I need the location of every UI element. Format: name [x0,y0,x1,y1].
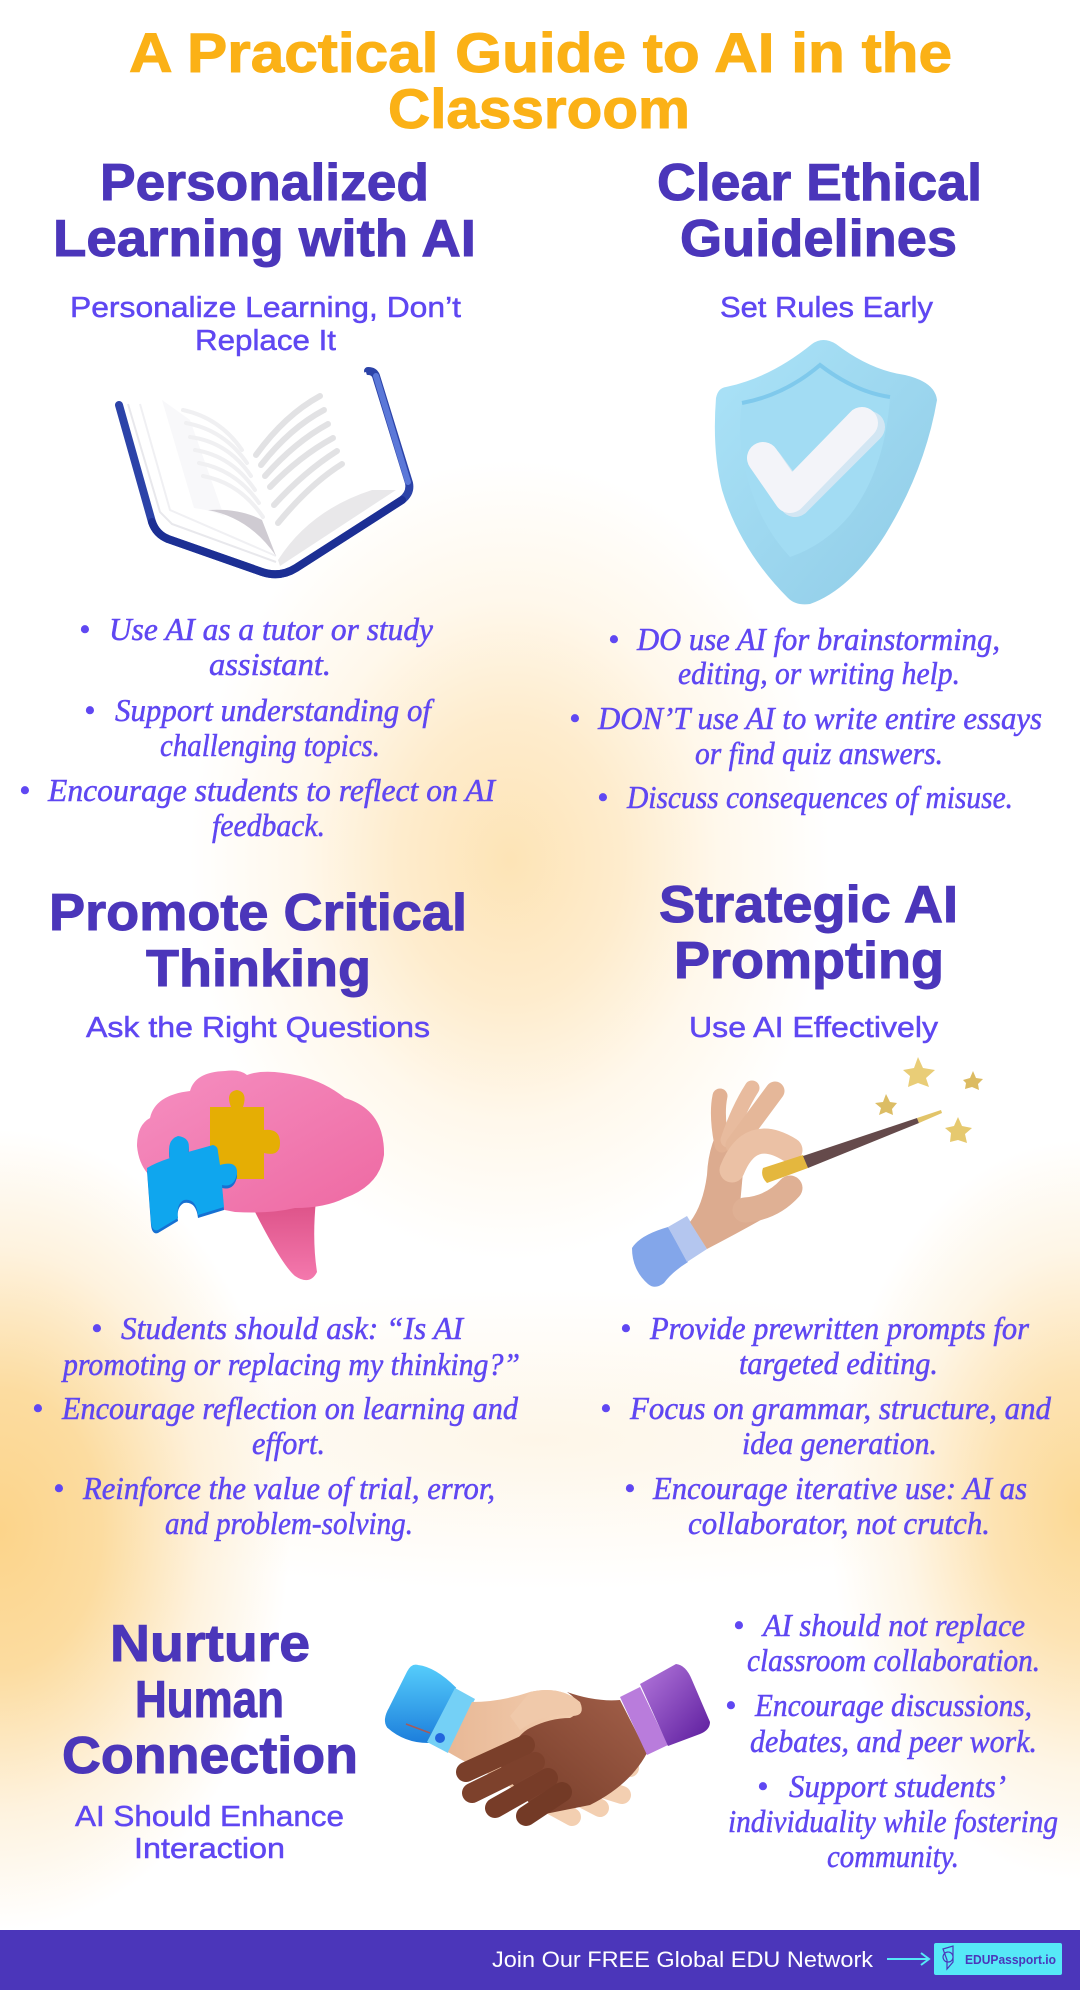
heading [657,154,982,268]
bullet list: Support students’ [789,1768,1006,1804]
bullet list: Focus on grammar, structure, and [629,1390,1052,1426]
bullet list: Discuss consequences of misuse. [626,779,1013,815]
subheading: Personalize Learning, Don’t [70,292,461,324]
heading [49,884,467,998]
bullet list: • [597,779,608,815]
bullet list: debates, and peer work. [750,1723,1037,1759]
subheading: Ask the Right Questions [86,1012,430,1044]
panel: strategic AI prompting [600,876,1052,1541]
bullet list: feedback. [212,807,325,843]
bullet list: effort. [252,1425,325,1461]
heading: Prompting [674,932,944,990]
bullet list: • [79,611,90,647]
bullet list [569,621,1042,815]
bullet list: • [32,1390,43,1426]
bullet list: and problem-solving. [165,1505,413,1541]
panel: promote critical thinking [32,884,520,1541]
heading: Promote Critical [49,884,467,942]
bullet list: • [19,772,30,808]
bullet list: • [757,1768,768,1804]
subheading: AI Should Enhance [75,1801,344,1833]
heading [62,1615,358,1785]
title: A Practical Guide to AI in the [129,21,952,84]
heading: Human [135,1671,284,1729]
bullet list: • [608,621,619,657]
bullet list: • [620,1310,631,1346]
heading: Connection [62,1727,358,1785]
subheading [75,1801,344,1865]
bullet list: • [91,1310,102,1346]
bullet list [32,1310,520,1541]
footer call to action: Join Our FREE Global EDU Network [492,1947,874,1972]
logo badge: EDUPassport.io [965,1952,1056,1967]
bullet list [19,611,496,843]
bullet list: Encourage reflection on learning and [61,1390,519,1426]
arrow [887,1953,929,1965]
title: Classroom [388,77,690,140]
heading [53,154,476,268]
icon: open book [119,371,409,574]
panel: clear ethical guidelines [569,154,1042,815]
bullet list: editing, or writing help. [678,655,960,691]
subheading: Interaction [134,1833,285,1865]
bullet list: collaborator, not crutch. [688,1505,990,1541]
bullet list: • [600,1390,611,1426]
bullet list: • [53,1470,64,1506]
panel: nurture human connection [62,1607,1058,1874]
heading: Strategic AI [659,876,958,934]
bullet list: • [569,700,580,736]
icon: shield with check [715,340,937,604]
bullet list: Support understanding of [115,692,435,728]
bullet list: Students should ask: “Is AI [121,1310,464,1346]
bullet list: • [733,1607,744,1643]
panel: personalized learning [19,154,496,843]
bullet list: Use AI as a tutor or study [109,611,434,647]
bullet list: classroom collaboration. [747,1642,1040,1678]
bullet list: DO use AI for brainstorming, [636,621,1000,657]
icon: brain with puzzle piece [137,1070,384,1280]
subheading: Replace It [195,325,336,357]
logo badge [934,1943,1062,1975]
bullet list: • [725,1687,736,1723]
bullet list: community. [827,1838,959,1874]
icon: handshake [386,1664,710,1820]
heading: Nurture [110,1615,310,1673]
bullet list: Encourage discussions, [754,1687,1032,1723]
bullet list: challenging topics. [160,727,380,763]
bullet list: Encourage iterative use: AI as [652,1470,1027,1506]
bullet list: AI should not replace [761,1607,1025,1643]
footer bar [0,1930,1080,1990]
bullet list: • [84,692,95,728]
title [129,21,952,140]
bullet list: idea generation. [742,1425,937,1461]
bullet list: targeted editing. [739,1345,938,1381]
heading: Learning with AI [53,210,476,268]
bullet list: Encourage students to reflect on AI [47,772,496,808]
bullet list [725,1607,1058,1874]
bullet list: Provide prewritten prompts for [649,1310,1030,1346]
subheading: Use AI Effectively [689,1012,939,1044]
heading: Guidelines [680,210,957,268]
heading: Clear Ethical [657,154,982,212]
bullet list: DON’T use AI to write entire essays [597,700,1042,736]
heading: Thinking [146,940,371,998]
subheading [70,292,461,357]
bullet list: promoting or replacing my thinking?” [61,1346,520,1382]
heading [659,876,958,990]
bullet list: Reinforce the value of trial, error, [82,1470,495,1506]
bullet list [600,1310,1052,1541]
subheading: Set Rules Early [720,292,934,324]
bullet list: assistant. [209,646,331,682]
bullet list: or find quiz answers. [695,735,943,771]
bullet list: • [624,1470,635,1506]
heading: Personalized [100,154,429,212]
icon: hand holding magic wand [632,1057,983,1287]
bullet list: individuality while fostering [728,1803,1058,1839]
